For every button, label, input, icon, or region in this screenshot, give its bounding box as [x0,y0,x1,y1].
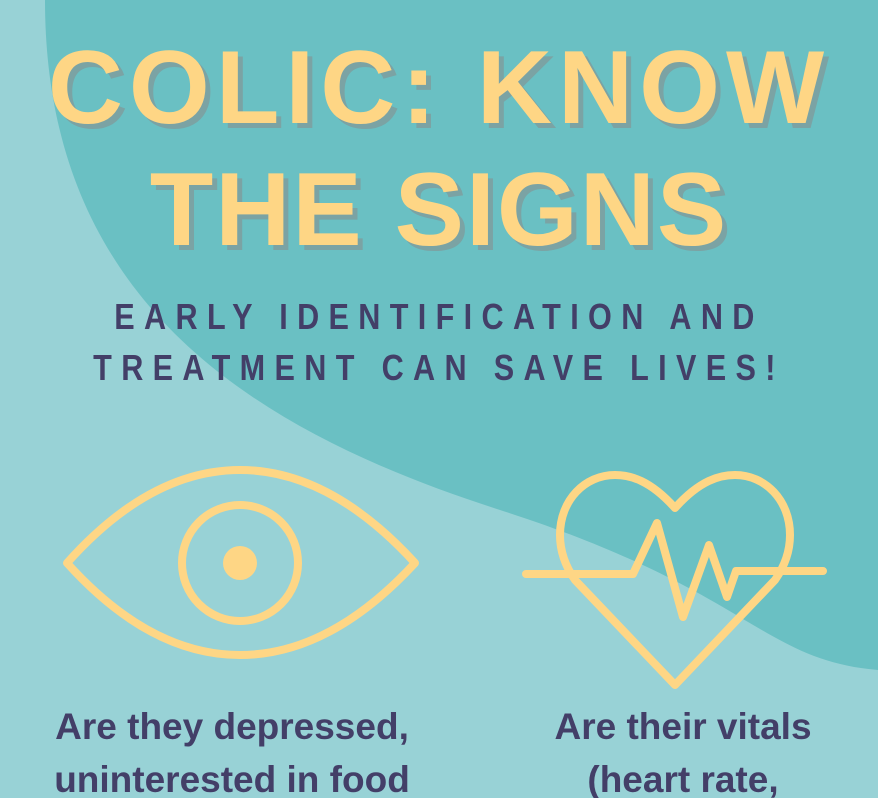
subtitle: EARLY IDENTIFICATION AND [114,296,764,337]
title line 2: THE SIGNS [150,152,728,268]
title: COLIC: KNOW [48,30,830,146]
text: right caption [554,706,812,798]
subtitle line 2: TREATMENT CAN SAVE LIVES! [93,347,785,388]
text: left caption: Are they depressed, [55,706,409,747]
text: left caption [54,706,410,798]
text: right caption: Are their vitals [554,706,812,747]
